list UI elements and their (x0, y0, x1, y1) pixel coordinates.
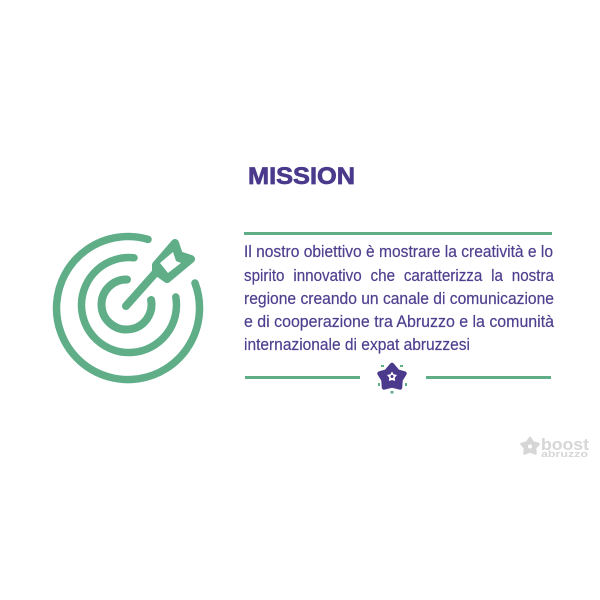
line 1: Il nostro obiettivo è mostrare la creatività e lo (244, 243, 553, 261)
green accents (378, 365, 407, 394)
divider: bottom right line (426, 376, 551, 379)
divider: top line (244, 232, 552, 235)
star dot (390, 375, 394, 378)
star centre (387, 372, 397, 381)
watermark: boost abruzzo logo (522, 435, 589, 459)
line 4: e di cooperazione tra Abruzzo e la comunità (244, 313, 555, 331)
icon: target with arrow (57, 237, 200, 380)
watermark star centre (528, 444, 532, 448)
line 2: spirito innovativo che caratterizza la nostra (244, 267, 555, 285)
divider: bottom left line (245, 376, 360, 379)
line 3: regione creando un canale di comunicazione (244, 290, 554, 308)
arrow shaft (126, 270, 158, 306)
inner ring (102, 279, 152, 329)
middle ring (81, 258, 176, 353)
star body (380, 365, 404, 388)
text block: mission statement (244, 243, 555, 354)
watermark word boost: boost (541, 435, 589, 454)
line 5: internazionale di expat abruzzesi (244, 336, 470, 354)
outer ring (57, 237, 200, 380)
arrow fletching (156, 243, 191, 279)
heading: mission: MISSION (248, 163, 355, 190)
watermark word abruzzo: abruzzo (541, 449, 589, 459)
icon: purple star emblem (378, 365, 407, 394)
arrow fletching cutout (160, 252, 181, 273)
watermark star (522, 438, 538, 454)
